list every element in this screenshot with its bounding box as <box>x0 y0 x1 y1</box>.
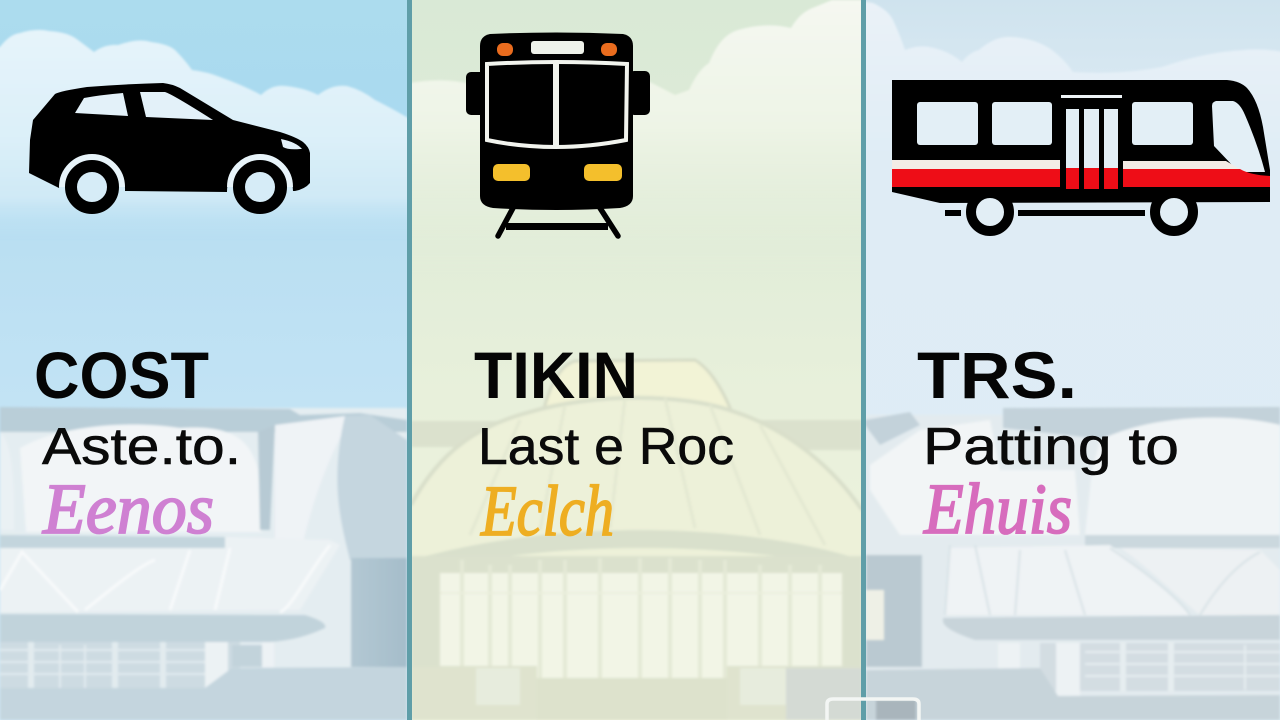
accent word: Ehuis: Ehuis <box>923 469 1072 549</box>
icon: bus <box>892 80 1270 231</box>
right panel background with sky, cloud and station <box>855 0 1280 720</box>
subtitle: Aste.to.: Aste.to. <box>42 418 241 476</box>
rails <box>498 208 618 236</box>
left panel background with sky, clouds and station <box>0 0 420 720</box>
divider: right <box>861 0 866 720</box>
subtitle: Last e Roc: Last e Roc <box>478 418 734 476</box>
icon: car <box>29 83 310 208</box>
heading: TIKIN: TIKIN <box>474 338 638 412</box>
panel: bus <box>855 0 1280 720</box>
accent word: Eenos: Eenos <box>42 469 214 549</box>
panel: car cost <box>0 0 420 720</box>
white outline at bottom edge <box>827 699 919 720</box>
divider: left <box>407 0 412 720</box>
subtitle: Patting to: Patting to <box>923 418 1179 476</box>
icon: train front <box>466 32 650 236</box>
panel: train <box>400 0 875 720</box>
heading: TRS.: TRS. <box>917 338 1077 412</box>
accent word: Eclch: Eclch <box>480 471 614 551</box>
heading: COST: COST <box>34 338 209 412</box>
middle panel background with sky, cloud and domed station <box>400 0 875 720</box>
